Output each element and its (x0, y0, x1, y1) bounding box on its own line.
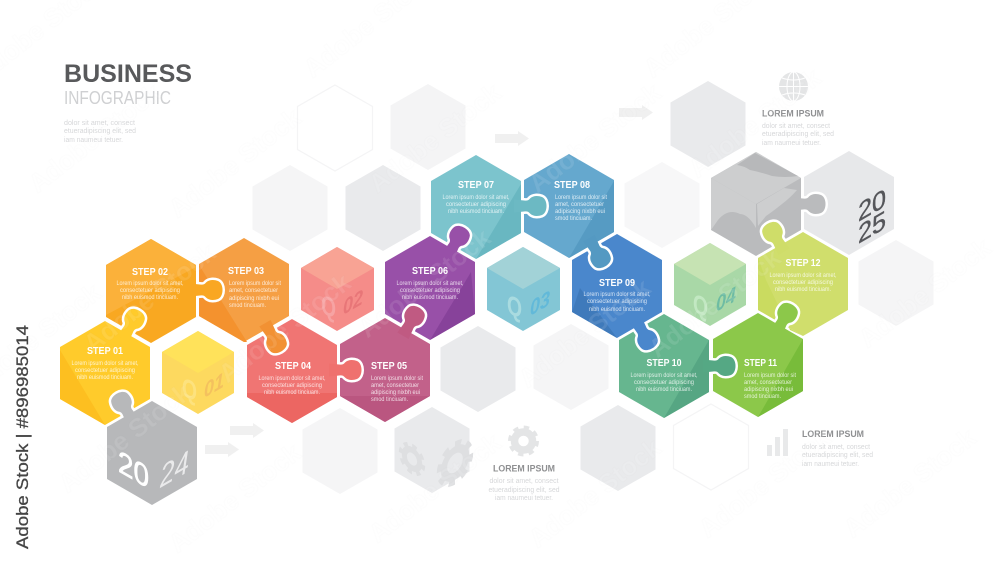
hexagon (524, 154, 614, 271)
hexagon: 2024: 24 (159, 444, 189, 496)
cube: Q 01: 01 (204, 367, 224, 403)
label: STEP 05 (371, 361, 407, 372)
body text: nibh euismod tinciuam. (77, 374, 133, 381)
text block: gear note (488, 464, 560, 502)
body text (744, 372, 796, 400)
text block: chart note: etueradipiscing elit, sed (802, 452, 873, 459)
watermark: Adobe Stock (78, 237, 222, 359)
hexagon: 2025 (804, 151, 894, 255)
body text: nibh euismod tinciuam. (636, 386, 692, 393)
text block: chart note (802, 429, 873, 468)
body text: adipiscing nixbh eui (371, 389, 420, 396)
background hexagon (858, 240, 934, 326)
body text: consectetuer adipiscing (446, 201, 506, 208)
cube: Q 02: 02 (343, 284, 363, 320)
watermark: Adobe Stock (838, 422, 982, 544)
step 02 (106, 239, 222, 343)
intro text (64, 120, 136, 144)
step 12 (758, 219, 848, 336)
hexagon (340, 303, 430, 422)
label: STEP 09 (599, 278, 635, 289)
body text: smod tinciuam. (229, 302, 266, 309)
arrow (619, 105, 653, 120)
watermark: Adobe Stock (523, 77, 667, 199)
watermark: Adobe Stock (363, 77, 507, 199)
body text: smod tinciuam. (371, 396, 408, 403)
background hexagon (302, 408, 378, 494)
step 11 (713, 300, 803, 417)
stock id vertical text: Adobe Stock | #896985014 (13, 325, 32, 549)
body text: smod tinciuam. (555, 215, 592, 222)
intro text: iam naumeui tetuer. (64, 137, 123, 144)
text block: gear note: LOREM IPSUM (493, 464, 555, 474)
watermark: Adobe Stock (23, 77, 167, 199)
body text: nibh euismod tinciuam. (589, 306, 645, 313)
body text (555, 194, 607, 222)
body text: amet, consectetuer (229, 287, 278, 294)
cube: Q 01 (162, 331, 234, 414)
watermark: Adobe Stock (523, 432, 667, 554)
body text (630, 372, 698, 393)
background hexagon (580, 405, 656, 491)
body text: amet, consectetuer (744, 379, 792, 386)
background hexagon (670, 81, 746, 167)
text block: globe note: dolor sit amet, consect (762, 123, 830, 130)
body text (442, 194, 510, 215)
title: BUSINESS (64, 60, 192, 88)
label: STEP 06 (412, 266, 448, 277)
body text: Lorem ipsum dolor sit amet, (770, 272, 837, 279)
hexagon: 2025: 25 (858, 205, 886, 250)
body text: smod tinciuam. (744, 393, 781, 400)
body text: Lorem ipsum dolor sit (744, 372, 796, 379)
watermark: Adobe Stock (643, 242, 787, 364)
arrow (205, 442, 239, 457)
body text: consectetuer adipiscing (773, 279, 833, 286)
icon: bar chart (767, 429, 788, 456)
text block: globe note: iam naumeui tetuer. (762, 140, 821, 147)
body text: adipiscing nixbh eui (229, 295, 279, 302)
watermark: Adobe Stock (693, 422, 837, 544)
cube: Q 02: Q (321, 289, 336, 324)
body text: Lorem ipsum dolor sit amet, (396, 280, 464, 287)
watermark: Adobe Stock (163, 102, 307, 224)
label: STEP 04 (275, 361, 311, 372)
label: STEP 12 (786, 258, 821, 269)
body text (371, 375, 423, 403)
step 08 (524, 154, 614, 271)
watermark: Adobe Stock (363, 427, 507, 549)
intro text: dolor sit amet, consect (64, 120, 135, 127)
watermark: Adobe Stock (683, 62, 827, 184)
hexagon: 2025: 20 (858, 183, 886, 228)
body text: nibh euismod tinciuam. (448, 208, 504, 215)
body text: Lorem ipsum dolor sit amet, (442, 194, 510, 201)
label: STEP 07 (458, 180, 494, 191)
body text: adipiscing nixbh eui (744, 386, 793, 393)
hexagon: 2024 (107, 389, 197, 505)
hexagon (199, 238, 290, 356)
label: STEP 11 (744, 358, 777, 369)
body text (584, 291, 651, 313)
body text: Lorem ipsum dolor sit amet, (258, 375, 326, 382)
icon: globe (779, 72, 808, 101)
watermark: Adobe Stock (353, 222, 497, 344)
watermark: Adobe Stock (163, 437, 307, 559)
hexagon (713, 300, 803, 417)
body text: nibh euismod tinciuam. (264, 389, 320, 396)
cube: Q 01: Q (182, 372, 197, 407)
text block: chart note: dolor sit amet, consect (802, 444, 870, 451)
background hexagon (674, 404, 748, 490)
text block: globe note (762, 108, 834, 147)
intro text: etueradipiscing elit, sed (64, 128, 136, 135)
cube: Q 02 (301, 247, 374, 331)
body text (396, 280, 464, 301)
hexagon (385, 223, 475, 340)
hexagon: world map cube (711, 152, 826, 256)
label: STEP 02 (132, 267, 168, 278)
body text (770, 272, 837, 293)
step 01 (60, 306, 150, 425)
hexagon (247, 319, 362, 423)
body text: Lorem ipsum dolor sit amet, (584, 291, 651, 298)
text block: globe note: etueradipiscing elit, sed (762, 131, 834, 138)
hexagon (572, 234, 662, 353)
cube: Q 04: 04 (716, 281, 736, 317)
background hexagon (390, 84, 466, 170)
step 07 (431, 155, 546, 259)
step 09 (572, 234, 662, 353)
body text: consectetuer adipiscing (587, 298, 647, 305)
title (64, 60, 192, 108)
text block: chart note: iam naumeui tetuer. (802, 461, 859, 468)
step 05 (340, 303, 430, 422)
body text: Lorem ipsum dolor sit amet, (630, 372, 698, 379)
step 04 (247, 319, 362, 423)
watermark: Adobe Stock (513, 272, 657, 394)
title: INFOGRAPHIC (64, 88, 171, 108)
body text: amet, consectetuer (555, 201, 604, 208)
hexagon: 2024: 20 (118, 444, 149, 496)
icon: gear (510, 428, 537, 454)
step 06 (385, 223, 475, 340)
body text: Lorem ipsum dolor sit (555, 194, 607, 201)
hexagon (758, 219, 848, 336)
watermark: Adobe Stock (213, 267, 357, 389)
gears hexagon (394, 407, 471, 493)
text block: gear note: etueradipiscing elit, sed (488, 487, 560, 494)
body text (116, 280, 184, 301)
label: STEP 03 (228, 266, 264, 277)
background hexagon (346, 165, 420, 251)
step 03 (199, 238, 290, 356)
cube: Q 03 (487, 247, 560, 331)
cube: Q 03: Q (507, 289, 522, 324)
body text: nibh euismod tinciuam. (402, 294, 458, 301)
label: STEP 08 (554, 180, 590, 191)
text block: globe note: LOREM IPSUM (762, 108, 824, 120)
step 10 (619, 314, 736, 418)
body text: consectetuer adipiscing (75, 367, 135, 374)
body text: nibh euismod tinciuam. (122, 294, 178, 301)
body text: consectetuer adipiscing (634, 379, 694, 386)
body text: amet, consectetuer (371, 382, 419, 389)
background hexagon (298, 85, 372, 171)
label: STEP 01 (87, 346, 123, 357)
cube: Q 04: Q (693, 288, 708, 323)
label: STEP 10 (646, 358, 682, 369)
hexagon (431, 155, 546, 259)
text block: chart note: LOREM IPSUM (802, 429, 864, 440)
background hexagon (440, 326, 516, 412)
background hexagon (534, 324, 608, 410)
hexagon (60, 306, 150, 425)
hexagon (619, 314, 736, 418)
arrow (495, 131, 529, 146)
background hexagon (252, 165, 328, 251)
background hexagon (624, 162, 700, 248)
watermark: Adobe Stock (853, 232, 997, 354)
body text: Lorem ipsum dolor sit (229, 280, 281, 287)
body text (229, 280, 281, 309)
body text: adipiscing nixbh eui (555, 208, 605, 215)
body text (258, 375, 326, 396)
body text: Lorem ipsum dolor sit (371, 375, 423, 382)
watermark: Adobe Stock (53, 377, 197, 499)
hexagon (106, 239, 222, 343)
body text: Lorem ipsum dolor sit amet, (72, 360, 139, 367)
cube: Q 03: 03 (530, 285, 550, 321)
body text: consectetuer adipiscing (262, 382, 322, 389)
body text: nibh euismod tinciuam. (775, 286, 831, 293)
body text: consectetuer adipiscing (400, 287, 460, 294)
text block: gear note: dolor sit amet, consect (490, 478, 559, 485)
body text: Lorem ipsum dolor sit amet, (116, 280, 184, 287)
cube: Q 04 (674, 243, 746, 326)
text block: gear note: iam naumeui tetuer. (495, 495, 553, 502)
arrow (230, 423, 264, 438)
body text: consectetuer adipiscing (120, 287, 180, 294)
body text (72, 360, 139, 381)
